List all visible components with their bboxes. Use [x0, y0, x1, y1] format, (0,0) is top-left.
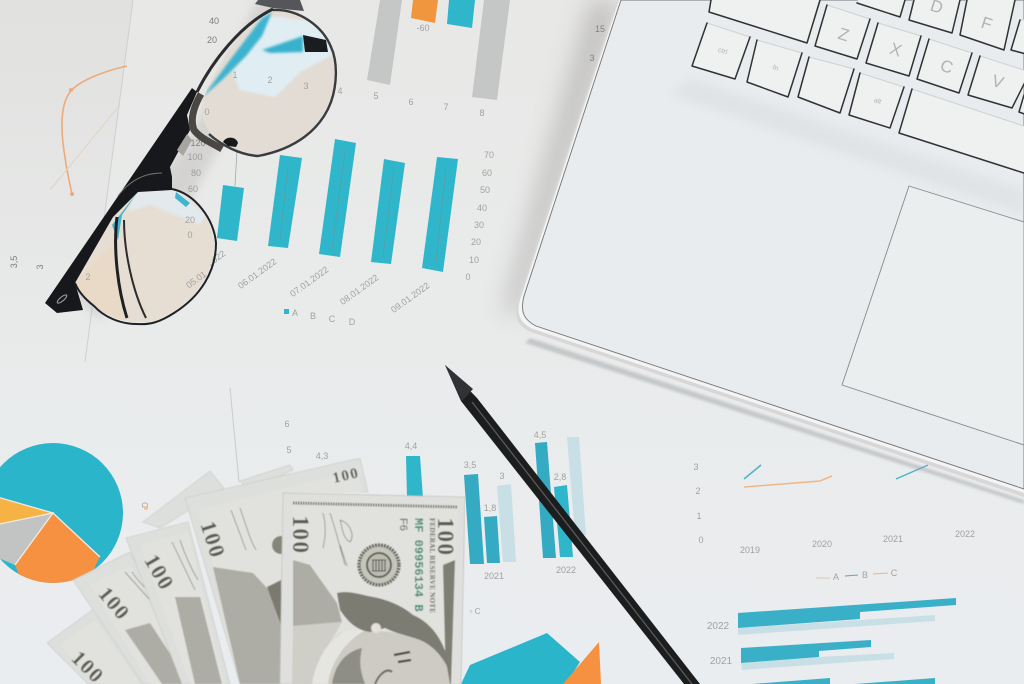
right axis numbers: 0 — [465, 272, 471, 282]
glasses — [45, 0, 338, 325]
chart: top bars with axis numbers: -60 — [416, 23, 430, 33]
bill three: 100 — [139, 550, 180, 595]
money: stack of hundred dollar bills — [47, 458, 465, 684]
chart: lower column bars: 6 — [284, 419, 290, 429]
chart: line chart lower right: 2020 — [812, 539, 832, 549]
legend: C — [329, 314, 336, 324]
portrait jacket — [293, 560, 342, 626]
corner hundreds: 100 — [288, 516, 313, 554]
chart: horizontal bars lower right: 2022 — [707, 621, 730, 632]
chart: line chart lower right: 1 — [696, 511, 702, 521]
chart: line chart lower right — [693, 462, 975, 582]
chart: lower column bars: 1,8 — [484, 503, 496, 513]
chart: lower column bars: 3 — [499, 471, 505, 481]
legend: A — [292, 308, 298, 318]
frame band and bridge — [45, 0, 304, 313]
chart: lower column bars: 4,5 — [534, 430, 546, 440]
right axis numbers: 50 — [480, 185, 490, 195]
bill four: 100 — [94, 582, 135, 625]
back slivers — [143, 471, 224, 528]
left axis numbers — [187, 138, 206, 194]
serial number: MF 09956134 B — [411, 518, 425, 612]
chart: line chart lower right: 2019 — [740, 545, 760, 555]
legend: line chart — [816, 568, 898, 582]
front bill: 100 — [433, 518, 458, 556]
chart: top bars with axis numbers: 3 — [589, 53, 595, 63]
legend: B — [310, 311, 316, 321]
right axis numbers: 30 — [474, 220, 484, 230]
chart: lower column bars: 3,5 — [464, 460, 476, 470]
upper lens: 1 — [232, 70, 238, 80]
lower lens: 05.01 — [184, 269, 208, 290]
lower lens: 20 — [185, 215, 195, 225]
chart: line chart lower right: 2022 — [955, 529, 975, 539]
chart: top bars with axis numbers: 20 — [207, 35, 217, 45]
chart: lower column bars: ▫ C — [470, 607, 481, 616]
keyboard keys: C — [938, 56, 955, 78]
chart: orange line sketch on left sheet: 3,5 — [9, 256, 19, 268]
seal — [359, 545, 399, 585]
legend: D — [349, 317, 356, 327]
keyboard keys: fn — [772, 64, 779, 73]
chart: lower column bars: 2,8 — [554, 472, 566, 482]
date labels: 05.01.2022 — [185, 248, 227, 283]
keyboard keys: Z — [836, 24, 852, 45]
chart: lower column bars: D — [141, 502, 150, 508]
upper lens — [192, 9, 338, 156]
chart: top bars with axis numbers: 7 — [443, 102, 449, 112]
shape: bottom teal and orange area — [461, 633, 601, 684]
chart: lower column bars: 2021 — [484, 571, 504, 581]
chart: top bars with axis numbers: 5 — [373, 91, 379, 101]
chart: top bars with axis numbers: 15 — [595, 24, 605, 34]
right axis numbers: 60 — [482, 168, 492, 178]
keyboard keys: alt — [873, 97, 882, 106]
signatures — [323, 513, 352, 566]
front bill: FEDERAL RESERVE NOTE — [428, 518, 436, 613]
chart: line chart lower right: 2021 — [883, 534, 903, 544]
right axis numbers: 10 — [469, 255, 479, 265]
front bill: F6 — [397, 518, 409, 531]
chart: top bars with axis numbers: 4 — [337, 86, 343, 96]
lower lens — [70, 188, 216, 325]
bill three — [126, 522, 230, 684]
chart: line chart lower right: 3 — [693, 462, 699, 472]
date labels — [185, 248, 431, 315]
keyboard keys: V — [989, 71, 1007, 93]
pencil — [445, 365, 700, 684]
date labels: 07.01.2022 — [288, 264, 330, 299]
legend: line chart: B — [862, 570, 868, 580]
upper lens: 3 — [303, 81, 309, 91]
bill two — [185, 458, 368, 684]
laptop body — [516, 0, 1024, 497]
chart: dated teal bar chart — [185, 138, 494, 327]
chart: lower column bars: 4,4 — [405, 441, 417, 451]
bill five — [47, 608, 150, 684]
chart: line chart lower right: 2 — [695, 486, 701, 496]
left axis numbers: 100 — [187, 152, 203, 162]
portrait face — [312, 631, 450, 684]
right axis numbers: 40 — [477, 203, 487, 213]
upper lens: 0 — [204, 107, 210, 117]
right axis numbers: 70 — [484, 150, 494, 160]
bill four — [73, 552, 197, 684]
chart: line chart lower right: 0 — [698, 535, 704, 545]
legend: line chart: A — [833, 572, 839, 582]
chart: orange line sketch on left sheet — [9, 66, 127, 270]
chart: top bars with axis numbers: 40 — [209, 16, 219, 26]
keyboard keys — [692, 0, 1024, 175]
chart: lower column bars: 5 — [286, 445, 292, 455]
chart: lower column bars — [141, 419, 586, 616]
lower lens: 2 — [85, 272, 91, 282]
front bill — [280, 493, 465, 684]
left axis numbers: 60 — [188, 184, 198, 194]
legend: line chart: C — [891, 568, 898, 578]
keyboard keys: ctrl — [717, 47, 728, 56]
bill two: 100 — [331, 465, 361, 487]
chart: orange line sketch on left sheet: 3 — [35, 264, 45, 270]
legend — [284, 308, 356, 327]
keyboard keys: X — [887, 39, 904, 61]
chart: top bars with axis numbers: 8 — [479, 108, 485, 118]
right axis numbers — [465, 150, 494, 282]
right axis numbers: 20 — [471, 237, 481, 247]
chart: lower column bars: 2022 — [556, 565, 576, 575]
chart: top bars with axis numbers — [207, 0, 605, 118]
chart: pie — [0, 443, 123, 583]
lower lens: 0 — [187, 230, 193, 240]
date labels: 06.01.2022 — [236, 256, 278, 291]
left axis numbers: 80 — [191, 168, 201, 178]
bill two: 100 — [195, 518, 231, 561]
chart: horizontal bars lower right — [707, 598, 956, 684]
date labels: 09.01.2022 — [389, 280, 431, 315]
chart: lower column bars: 4,3 — [316, 451, 328, 461]
trackpad — [842, 186, 1024, 445]
chart: horizontal bars lower right: 2021 — [710, 656, 733, 667]
chart: top bars with axis numbers: 6 — [408, 97, 414, 107]
date labels: 08.01.2022 — [338, 272, 380, 307]
keyboard keys: F — [979, 13, 995, 34]
upper lens: 2 — [267, 75, 273, 85]
shadow: laptop cast shadow — [503, 0, 1024, 504]
left axis numbers: 120 — [190, 138, 206, 148]
portrait hair — [337, 592, 450, 672]
